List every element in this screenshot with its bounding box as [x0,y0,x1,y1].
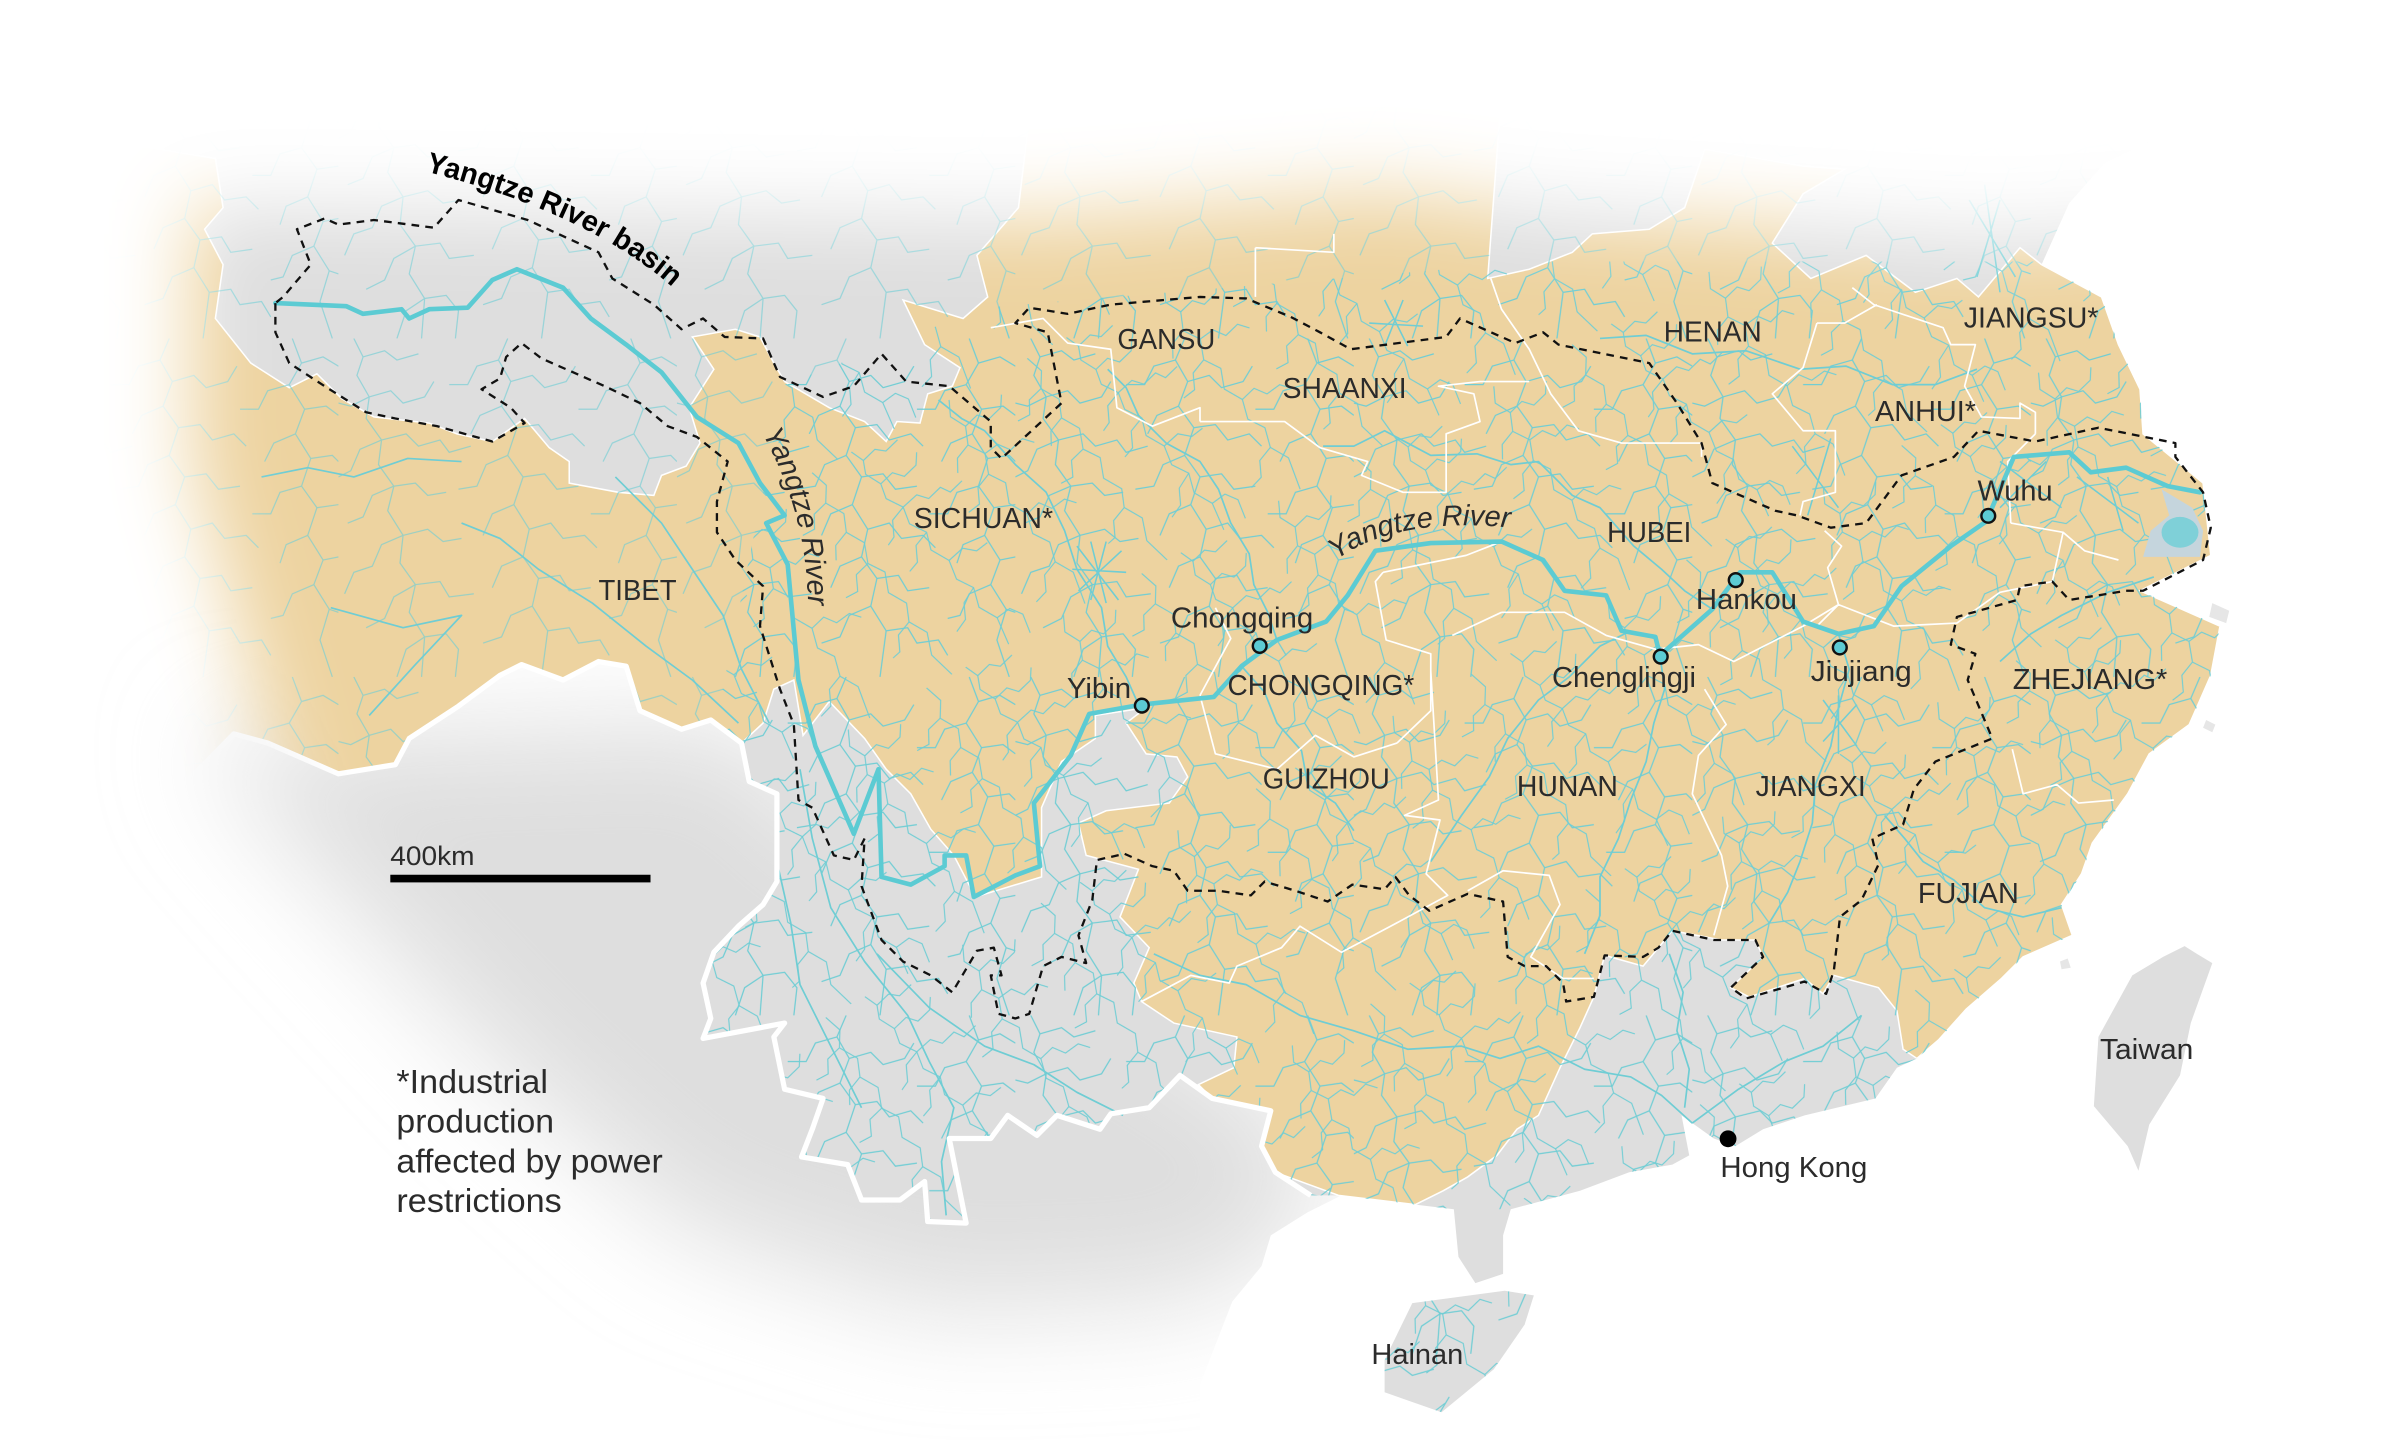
city: Chenglingji: Chenglingji [1552,661,1696,693]
footnote: production [396,1103,554,1140]
label: Jiangsu: JIANGSU* [1964,302,2098,334]
city markers and labels [1067,475,2193,1370]
Yangtze River main stem [275,269,2200,897]
province labels [598,302,2167,909]
city: Hankou: Hankou [1696,583,1797,615]
label: Anhui: ANHUI* [1875,395,1976,427]
label: Fujian: FUJIAN [1918,877,2019,909]
city: Yibin [1067,672,1149,713]
land: orange affected provinces [92,92,2220,1205]
rivers: Sichuan, Poyang and northern dense patches [1072,185,2138,754]
border: thick south-west national boundary [169,662,1311,1223]
background: grey surrounding land, faded [200,723,1326,1311]
delta: Shanghai grey-blue land [2143,489,2203,557]
sea: white water clipping Vietnam coast [1200,1195,1692,1441]
city: Jiujiang [1811,641,1912,687]
label: Sichuan: SICHUAN* [914,502,1053,534]
label: Gansu: GANSU [1117,323,1215,355]
curved label: Yangtze River middle: Yangtze River [1328,504,1512,556]
city: Chongqing: Chongqing [1171,602,1313,634]
label: Tibet: TIBET [598,574,677,606]
curved label: Yangtze River upper: Yangtze River [766,426,826,606]
footnote [396,1063,663,1219]
city: Jiujiang: Jiujiang [1811,655,1912,687]
land: grey base [206,180,2066,1283]
label: Zhejiang: ZHEJIANG* [2013,663,2167,695]
islets off Zhejiang coast [2060,603,2229,969]
map: land with provinces and rivers [140,143,2220,1412]
label: Taiwan: Taiwan [2100,1033,2193,1065]
rivers: major tributaries [262,335,2154,1215]
footnote: *Industrial [396,1063,548,1100]
city: Yibin: Yibin [1067,672,1131,704]
city: Hong Kong: Hong Kong [1720,1151,1867,1183]
Yangtze River basin dashed outline [275,200,2211,1018]
borders: provinces [991,234,2118,1002]
rivers: dense tributary network [144,148,2219,1412]
all labels, aligned to map [390,152,2193,1370]
delta: Shanghai teal river mesh [2162,517,2198,548]
scale bar: 400km [390,841,474,871]
label: Hunan: HUNAN [1517,770,1618,802]
label: Guizhou: GUIZHOU [1263,762,1390,794]
label: Chongqing province: CHONGQING* [1228,669,1414,701]
city: Wuhu [1978,475,2053,523]
label: Henan: HENAN [1664,315,1762,347]
label: Shaanxi: SHAANXI [1283,372,1407,404]
footnote: restrictions [396,1182,562,1219]
city: Wuhu: Wuhu [1978,475,2053,507]
scale bar [390,841,651,882]
label: Hainan: Hainan [1371,1338,1463,1370]
footnote: affected by power [396,1142,663,1179]
city: Hong Kong [1720,1130,1867,1183]
label: Hubei: HUBEI [1607,516,1691,548]
curved label: Yangtze River basin: Yangtze River basin [430,152,680,286]
label: Jiangxi: JIANGXI [1756,770,1866,802]
city: Chongqing [1171,602,1313,653]
island: Hainan [1385,1291,1534,1412]
island: Taiwan [2094,946,2212,1171]
